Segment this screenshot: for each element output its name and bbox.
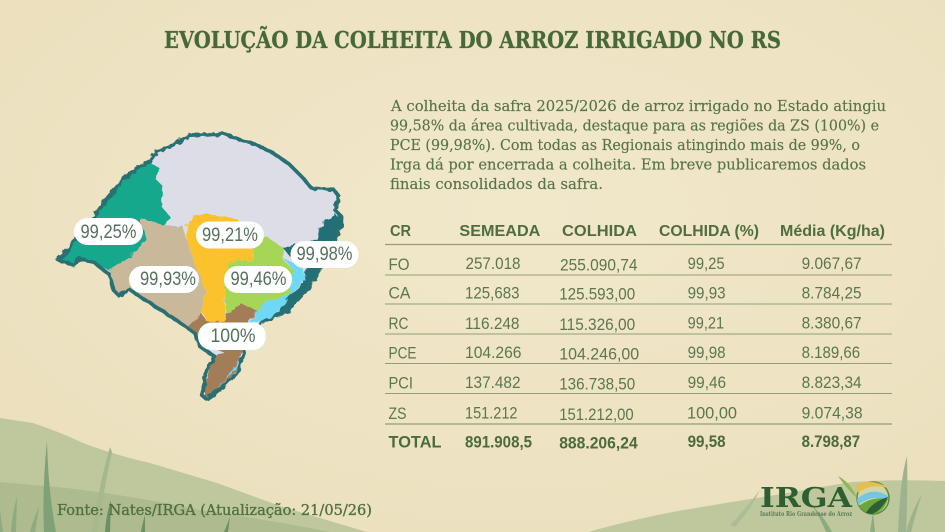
logo wordmark: IRGA [760, 483, 853, 514]
row: FO: 99,25 [688, 255, 725, 273]
row: PCE: PCE [388, 344, 416, 362]
row: FO [388, 255, 862, 274]
table header [390, 223, 885, 240]
row: PCE: 104.246,00 [559, 346, 639, 364]
row: CA: CA [388, 284, 410, 302]
label: 99,25% [74, 218, 143, 245]
label: 100%: 100% [210, 326, 256, 347]
row: RC: 99,21 [688, 314, 724, 332]
row: PCE [388, 344, 860, 364]
map base [57, 133, 342, 399]
row: PCI: 137.482 [465, 374, 520, 392]
row: ZS: 100,00 [687, 404, 737, 422]
row: TOTAL: 8.798,87 [802, 433, 860, 451]
table [385, 223, 892, 452]
label: 99,98%: 99,98% [296, 244, 353, 265]
intro paragraph: finais consolidados da safra. [390, 176, 603, 193]
row: CA: 125.593,00 [559, 286, 635, 304]
row: PCE: 8.189,66 [802, 344, 860, 362]
row: PCI: 8.823,34 [802, 374, 862, 392]
row: ZS: 151.212,00 [559, 406, 634, 424]
row: RC: 116.248 [465, 315, 520, 333]
region: dark teal coast [268, 213, 342, 320]
row: PCI: 99,46 [688, 374, 726, 392]
label: 99,98% [290, 241, 358, 268]
table header: COLHIDA (%) [659, 223, 759, 240]
source note: Fonte: Nates/IRGA (Atualização: 21/05/26) [57, 503, 372, 519]
label: 100% [198, 322, 266, 350]
row: FO: FO [388, 256, 410, 274]
label: 99,46%: 99,46% [230, 269, 287, 290]
row: CA: 8.784,25 [802, 284, 862, 302]
row: CA: 125,683 [465, 284, 520, 302]
label: 99,46% [224, 266, 292, 293]
region: CA tan [108, 218, 207, 326]
row: ZS: 151.212 [465, 404, 518, 422]
label: 99,93% [129, 266, 199, 293]
intro paragraph: 99,58% da área cultivada, destaque para as regiões da ZS (100%) e [390, 118, 879, 134]
row: FO: 9.067,67 [802, 255, 862, 273]
intro paragraph: PCE (99,98%). Com todas as Regionais atingindo mais de 99%, o [390, 137, 860, 154]
left hill with grass [0, 418, 367, 532]
intro paragraph [390, 98, 886, 193]
region: PCE light blue [250, 258, 305, 324]
table header: COLHIDA [562, 223, 637, 240]
row: ZS [388, 404, 863, 424]
row: PCI [388, 374, 862, 394]
label: 99,25%: 99,25% [80, 222, 137, 243]
row: FO: 257.018 [466, 255, 520, 273]
label: 99,21%: 99,21% [202, 225, 258, 246]
map of Rio Grande do Sul by region [57, 133, 342, 399]
label: 99,93%: 99,93% [140, 269, 196, 290]
row: ZS: ZS [388, 405, 406, 423]
lagoon [217, 361, 239, 389]
row: CA: 99,93 [688, 284, 726, 302]
row: FO: 255.090,74 [560, 256, 638, 274]
row: TOTAL [388, 433, 860, 452]
table header: Média (Kg/ha) [780, 223, 885, 240]
table rules [385, 244, 892, 424]
table header: SEMEADA [459, 223, 541, 240]
row: ZS: 9.074,38 [802, 404, 863, 422]
title: EVOLUÇÃO DA COLHEITA DO ARROZ IRRIGADO NO RS [164, 25, 781, 54]
table header: CR [390, 223, 411, 240]
row: PCE: 104.266 [465, 344, 522, 362]
row: PCE: 99,98 [688, 344, 726, 362]
logo tagline: Instituto Rio Grandense do Arroz [760, 511, 852, 518]
region: PCI green [225, 237, 293, 314]
row: TOTAL: 99,58 [688, 433, 726, 451]
map outline [57, 133, 342, 399]
row: TOTAL: TOTAL [388, 434, 442, 452]
region: ZS brown [188, 303, 257, 398]
row: RC [388, 314, 862, 334]
row: TOTAL: 891.908,5 [465, 434, 532, 452]
row: PCI: PCI [388, 374, 413, 392]
IRGA logo [760, 476, 890, 518]
row: RC: 115.326,00 [559, 316, 635, 334]
region: FO teal [58, 163, 172, 270]
row: CA [388, 284, 862, 304]
region: RC yellow [187, 213, 253, 322]
row: PCI: 136.738,50 [559, 376, 635, 394]
intro paragraph: A colheita da safra 2025/2026 de arroz irrigado no Estado atingiu [390, 98, 886, 115]
logo emblem [838, 476, 890, 514]
label: 99,21% [196, 222, 264, 248]
intro paragraph: Irga dá por encerrada a colheita. Em breve publicaremos dados [390, 156, 866, 174]
row: RC: RC [388, 315, 409, 333]
right hill with grass and wheat [588, 456, 945, 532]
row: TOTAL: 888.206,24 [559, 434, 638, 452]
row: RC: 8.380,67 [802, 314, 862, 332]
